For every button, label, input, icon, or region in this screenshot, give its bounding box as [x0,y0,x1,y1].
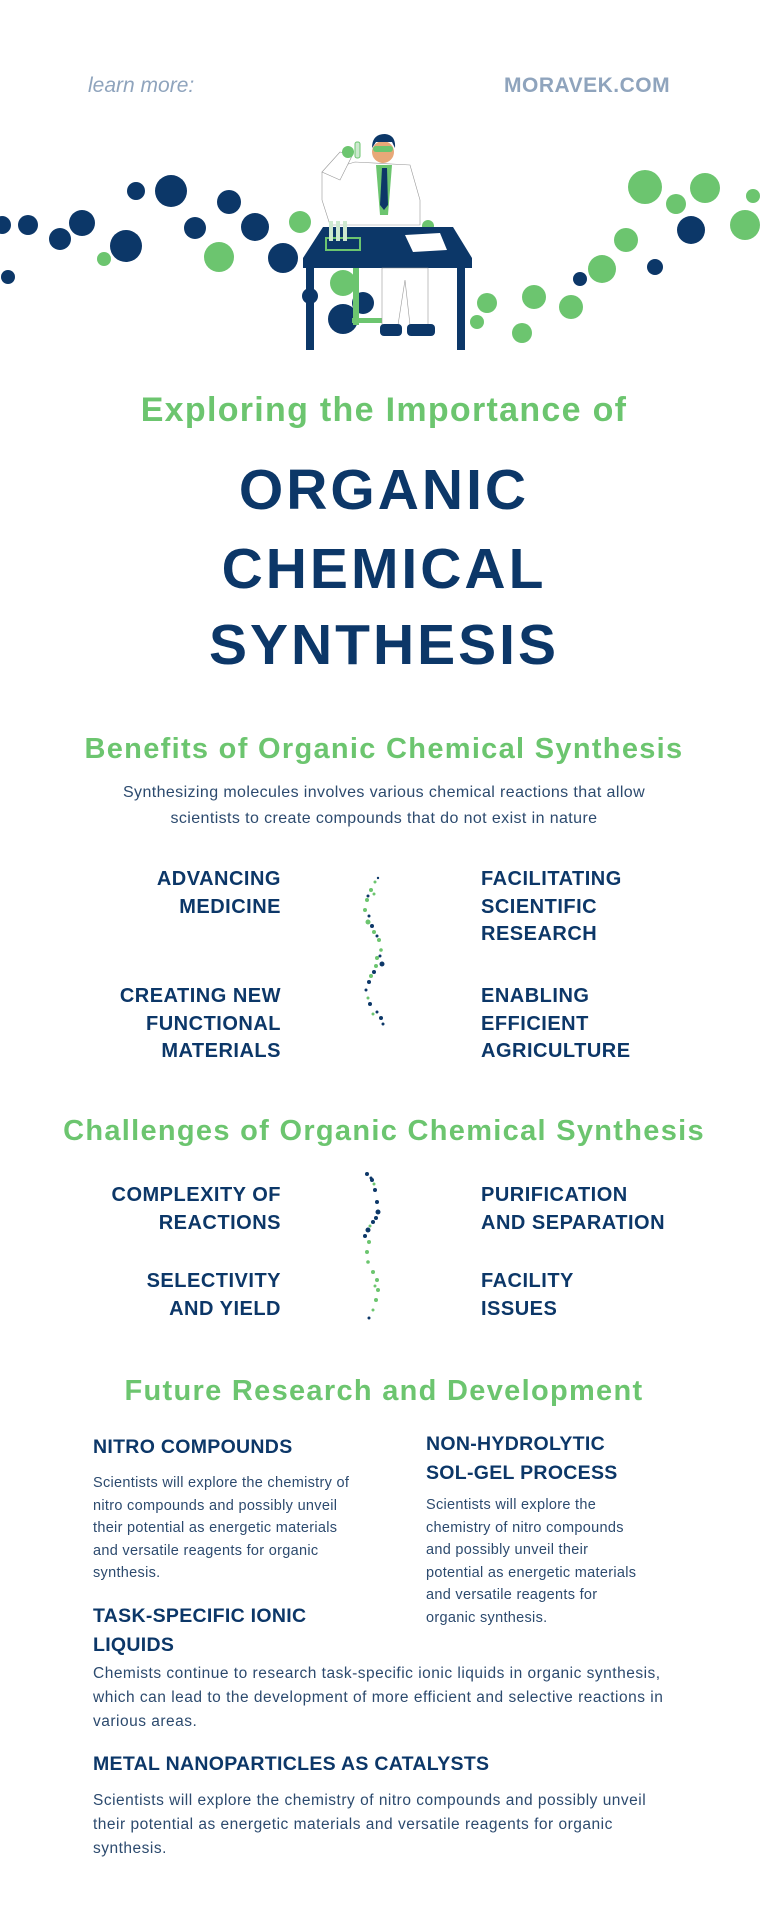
scientist [303,134,472,350]
subtitle: Exploring the Importance of: Exploring the Importance of [141,391,627,429]
benefit: advancing medicine [157,868,281,918]
benefit: facilitating scientific research: RESEARCH [481,923,597,945]
challenge: selectivity and yield: AND YIELD [169,1298,281,1320]
heading: Benefits: Benefits of Organic Chemical Synthesis [85,733,683,765]
block: non-hydrolytic sol-gel process: SOL-GEL PROCESS [426,1462,618,1484]
challenge: purification and separation: AND SEPARATION [481,1212,665,1234]
main title: SYNTHESIS [209,613,559,677]
main title [209,458,559,677]
benefit: facilitating scientific research: FACILITATING [481,868,622,890]
header: website: MORAVEK.COM [504,74,670,97]
icon: DNA helix benefits [363,876,384,1026]
benefits intro text: Synthesizing molecules involves various chemical reactions that allow [123,784,645,801]
block: non-hydrolytic sol-gel process: NON-HYDROLYTIC [426,1433,605,1455]
block: metal nanoparticles as catalysts: Scientists will explore the chemistry of nitro compounds and possibly unveil their potential as energetic materials and versatile reagents for organic synthesis. [93,1792,646,1857]
block: nitro compounds: NITRO COMPOUNDS [93,1436,292,1458]
main title: ORGANIC [239,458,529,522]
block: metal nanoparticles as catalysts: METAL NANOPARTICLES AS CATALYSTS [93,1753,489,1775]
benefit: creating new functional materials: MATERIALS [161,1040,281,1062]
block: metal nanoparticles as catalysts [93,1753,646,1857]
challenge: facility issues: ISSUES [481,1298,557,1320]
block: non-hydrolytic sol-gel process: Scientists will explore the chemistry of nitro compounds and possibly unveil their potential as energetic materials and versatile reagents for organic synthesis. [426,1497,636,1626]
block: task-specific ionic liquids: TASK-SPECIFIC IONIC [93,1605,306,1627]
challenge: facility issues [481,1270,574,1320]
benefit: advancing medicine: MEDICINE [179,896,281,918]
benefit: advancing medicine: ADVANCING [157,868,281,890]
benefits intro text [123,784,645,827]
challenge: complexity of reactions: COMPLEXITY OF [112,1184,281,1206]
block: task-specific ionic liquids [93,1605,663,1730]
block: nitro compounds: Scientists will explore the chemistry of nitro compounds and possibly unveil their potential as energetic materials and versatile reagents for organic synthesis. [93,1475,349,1581]
challenge: selectivity and yield: SELECTIVITY [147,1270,281,1292]
benefit: creating new functional materials [120,985,281,1062]
heading: Challenges: Challenges of Organic Chemical Synthesis [63,1115,705,1147]
benefit: enabling efficient agriculture: ENABLING [481,985,589,1007]
benefit: enabling efficient agriculture [481,985,631,1062]
main title: CHEMICAL [222,537,546,601]
hero illustration: molecule dots and scientist [0,134,760,350]
challenge: facility issues: FACILITY [481,1270,574,1292]
block: task-specific ionic liquids: Chemists continue to research task-specific ionic liquids in organic synthesis, which can lead to the development of more efficient and selective reactions in various areas. [93,1665,663,1730]
challenge: purification and separation [481,1184,665,1234]
benefit: facilitating scientific research [481,868,622,945]
benefit: creating new functional materials: CREATING NEW [120,985,281,1007]
challenge: selectivity and yield [147,1270,281,1320]
block: non-hydrolytic sol-gel process [426,1433,636,1626]
challenge: complexity of reactions [112,1184,281,1234]
benefit: creating new functional materials: FUNCTIONAL [146,1012,281,1034]
benefit: facilitating scientific research: SCIENTIFIC [481,896,597,918]
challenge: purification and separation: PURIFICATION [481,1184,628,1206]
challenge: complexity of reactions: REACTIONS [159,1212,281,1234]
benefit: enabling efficient agriculture: EFFICIENT [481,1012,589,1034]
heading: Future Research: Future Research and Development [125,1375,643,1407]
header: learn more: learn more: [88,74,194,97]
benefit: enabling efficient agriculture: AGRICULTURE [481,1040,631,1062]
benefits intro text: scientists to create compounds that do not exist in nature [170,810,597,827]
block: task-specific ionic liquids: LIQUIDS [93,1634,174,1656]
icon: DNA helix challenges [363,1172,380,1320]
